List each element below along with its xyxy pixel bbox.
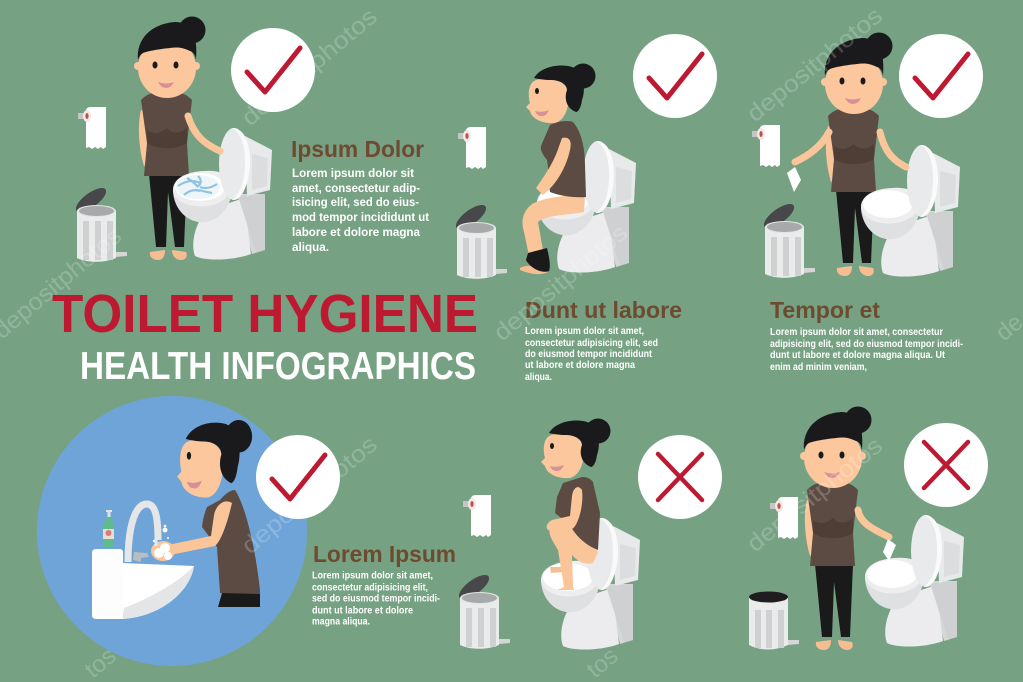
text: Ipsum Dolor body: isicing elit, sed do eius- (292, 195, 419, 209)
text: Tempor et body (770, 327, 963, 373)
icon: cross 2 (904, 423, 988, 507)
panel: sitting correctly (452, 34, 717, 383)
icon: check 1 (231, 28, 315, 112)
woman standing 5 (800, 406, 872, 650)
text: Ipsum Dolor body: labore et dolore magna (292, 225, 420, 239)
icon: closed bin (749, 592, 799, 650)
text: Ipsum Dolor body: mod tempor incididunt ut (292, 210, 429, 224)
toilet 1 (173, 128, 272, 260)
icon: toilet paper 3 (752, 125, 780, 167)
title line 2: HEALTH INFOGRAPHICS (80, 345, 476, 388)
panel: paper into toilet wrong (749, 406, 988, 650)
icon: check 4 (256, 435, 340, 519)
woman arm and flush water (176, 116, 220, 199)
panel: washing hands (37, 396, 456, 666)
text: Lorem Ipsum body: magna aliqua. (312, 616, 370, 628)
icon: check 2 (633, 34, 717, 118)
text: Dunt ut labore body: do eiusmod tempor incididunt (525, 349, 653, 360)
woman arm and paper (858, 510, 896, 561)
heading: Dunt ut labore: Dunt ut labore (525, 297, 682, 323)
watermark texts: depositphotos (237, 3, 383, 132)
panel: flush the toilet (72, 16, 429, 262)
heading: Ipsum Dolor: Ipsum Dolor (291, 136, 424, 162)
text: Dunt ut labore body: ut labore et dolore magna (525, 360, 635, 371)
text: Tempor et body: adipisicing elit, sed do eiusmod tempor incidi- (770, 339, 963, 350)
heading: Lorem Ipsum: Lorem Ipsum (313, 541, 456, 567)
panel: dispose paper in bin (752, 32, 983, 373)
text: Tempor et body: enim ad minim veniam, (770, 362, 867, 373)
watermark texts: depositphotos (742, 432, 888, 558)
icon: bin 4 (455, 571, 510, 649)
text: Ipsum Dolor body (292, 166, 429, 254)
toilet 2 (537, 141, 636, 273)
text: Lorem Ipsum body: consectetur adipisicing elit, (312, 582, 428, 594)
heading: Tempor et: Tempor et (770, 297, 880, 323)
text: Dunt ut labore body: consectetur adipisicing elit, sed (525, 338, 658, 349)
icon: bin 1 (72, 184, 127, 262)
woman standing 3 (821, 32, 892, 276)
watermark texts: depositphotos (237, 431, 383, 560)
text: Ipsum Dolor body: amet, consectetur adip- (292, 181, 420, 195)
watermark texts: depositphotos (742, 2, 888, 128)
blue circle (37, 396, 307, 666)
title (52, 284, 478, 388)
icon: soap bottle (103, 510, 114, 547)
woman squatting on toilet (541, 418, 610, 590)
icon: check 3 (899, 34, 983, 118)
woman standing 1 (134, 16, 206, 260)
title line 1: TOILET HYGIENE (52, 284, 478, 344)
toilet 3 (861, 145, 960, 277)
icon: bin 3 (760, 200, 815, 278)
woman sitting correctly (520, 64, 596, 274)
icon: toilet paper 5 (770, 497, 798, 539)
text: Lorem Ipsum body (312, 570, 440, 628)
icon: toilet paper 2 (458, 127, 486, 169)
text: Ipsum Dolor body: Lorem ipsum dolor sit (292, 166, 414, 180)
text: Tempor et body: dunt ut labore et dolore magna aliqua. Ut (770, 350, 946, 361)
toilet 5 (865, 515, 964, 647)
woman arms and paper (787, 132, 906, 192)
panel: wrong squatting (455, 418, 722, 650)
icon: bin 2 (452, 201, 507, 279)
toilet 4 (541, 518, 640, 650)
text: Dunt ut labore body: aliqua. (525, 372, 552, 383)
text: Tempor et body: Lorem ipsum dolor sit amet, consectetur (770, 327, 943, 338)
icon: sink (92, 549, 194, 619)
text: Dunt ut labore body (525, 326, 658, 383)
icon: toilet paper 1 (78, 107, 106, 149)
text: Lorem Ipsum body: sed do eiusmod tempor incidi- (312, 594, 440, 604)
icon: faucet (128, 504, 158, 562)
woman washing hands (151, 420, 260, 607)
text: Lorem Ipsum body: dunt ut labore et dolore (312, 606, 413, 616)
icon: cross 1 (638, 435, 722, 519)
text: Lorem Ipsum body: Lorem ipsum dolor sit amet, (312, 570, 433, 582)
text: Dunt ut labore body: Lorem ipsum dolor sit amet, (525, 326, 644, 337)
watermark texts: depositphotos (489, 219, 633, 347)
text: Ipsum Dolor body: aliqua. (292, 240, 329, 254)
icon: toilet paper 4 (463, 495, 491, 537)
